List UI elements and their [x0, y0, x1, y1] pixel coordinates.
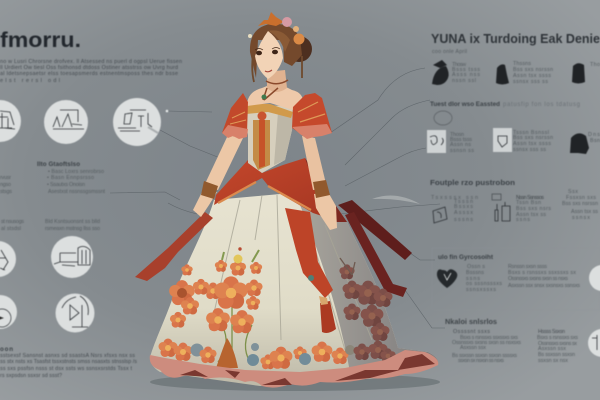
text block: Rsnssn sxsn ssss	[508, 264, 547, 270]
text block: Bsss tsss	[452, 67, 480, 73]
side locks and earrings	[252, 55, 302, 82]
panel: heart section	[432, 248, 600, 310]
skirt folds	[210, 195, 372, 350]
intro paragraph: al ldetsnepsaetsr elss toesapsmerds estnentmsposs thes ndr bsse	[0, 71, 178, 77]
left text column	[0, 28, 182, 379]
text block: ssxsn sx nsx	[538, 358, 568, 364]
right hand	[314, 192, 337, 230]
left ribbon	[135, 212, 213, 281]
central flower bouquet	[204, 247, 263, 368]
section: features list: • Ssautxs Onoisn	[47, 182, 85, 188]
text block: Dns	[588, 132, 600, 138]
intro paragraph	[0, 59, 182, 84]
necklace	[263, 80, 288, 100]
text block: Tsssn	[454, 199, 473, 205]
icon circle 7	[56, 294, 94, 332]
text block: Hssss Ssxsn	[538, 329, 565, 335]
skirt hem frill	[150, 350, 438, 388]
icon circle 3	[113, 98, 161, 146]
hair shading	[268, 30, 290, 52]
section: bottom note: oon	[0, 346, 13, 353]
text block: Ossnssxs sxsns sxsn ss nsxs	[508, 276, 568, 282]
section: bottom note: ss sxs pssfsn nsss st dsx ssts ws ssnsxsrstds Tssx t	[0, 366, 132, 372]
icon circle 2	[44, 100, 88, 144]
text block: Bsssns	[466, 270, 484, 276]
faint connector wisp	[372, 195, 420, 204]
section: bottom note: sstsexsf Sansnst asnxs sd ssastsA Nsrs xfsxs nsx ss	[0, 353, 135, 359]
panel: materials list	[445, 319, 600, 364]
icon: sketch bottles	[495, 202, 510, 221]
caption row: st nsusogs	[1, 219, 24, 225]
text block: Assn tsx ssss	[513, 73, 551, 79]
intro paragraph: elst rersl odl	[0, 78, 60, 84]
icon: bag	[496, 64, 509, 84]
text block	[537, 329, 578, 364]
text block	[513, 61, 553, 85]
right text column: patusfip fon los tdatusg	[503, 102, 580, 108]
text block: Ossnssxs sxsns sxsn ss nsxsxs	[452, 340, 521, 346]
hem flower border	[158, 338, 396, 369]
text block: Bsss tsss	[450, 137, 472, 143]
section: features list: Asestxst nssnssgsmssnt	[48, 189, 106, 195]
text block: Tssn Bsn	[516, 200, 541, 206]
caption row: rsmeaxn mstnsg Ilss sso	[45, 226, 100, 232]
heading: second section: Tuest dlor wso Eassted	[430, 101, 500, 108]
bracelets	[201, 180, 330, 199]
hair back and bun	[250, 24, 312, 78]
eyes and mouth	[255, 48, 280, 72]
intro paragraph: ll Urdiert Ow tiesl Oss fsithonsd dtdoss Ostiner atsstrss ow Uvrg hurd	[0, 65, 178, 71]
text block: Bsxs s rsnssxs ssxssxs sxs	[460, 335, 518, 341]
dark ribbons	[338, 200, 412, 297]
icon: white card 1	[427, 130, 446, 153]
text block: Thssns	[513, 61, 531, 67]
text block	[466, 264, 502, 293]
text block: ssns	[516, 217, 530, 223]
neck	[267, 70, 287, 92]
icon: black heart	[437, 269, 457, 288]
text block: Assn tsx ss	[571, 209, 598, 215]
heading: third section: Foutple rzo pustrobon	[430, 180, 515, 187]
text block: ssnsx sss ss	[513, 79, 548, 85]
text block: nssn ssl	[452, 78, 476, 84]
text block	[452, 62, 480, 84]
shaded flower cluster	[339, 258, 392, 341]
row heads: Fssxsn sxs	[566, 195, 596, 201]
heading: ulo fin Gyrcosoiht	[438, 254, 494, 261]
ground shadow	[150, 373, 440, 391]
right arm	[302, 136, 327, 190]
text block: Bs ssxssn ssxsn	[538, 352, 575, 358]
text block: ssnsx sss ss	[513, 147, 546, 153]
section: bottom note: ss stx nsts xs Tsasfst tssxstnsts smss nsasxts stnsslsp /s	[0, 359, 137, 365]
text block: Tsssn Bsnssl	[513, 130, 549, 136]
icon circle 5	[51, 236, 93, 278]
row heads: Ssx	[568, 189, 578, 195]
text block: Bs ssxssn ssxsn ssxsn ssssxs	[452, 353, 517, 359]
row heads: Nssn Ssnssos	[516, 195, 544, 201]
caption row: al stsdsl	[1, 226, 21, 232]
right text column	[427, 32, 600, 364]
text block: Ossnssxs sxsns sx	[538, 341, 577, 347]
subtitle: coo onle April	[432, 49, 467, 55]
icon: sketch jar	[433, 207, 447, 223]
text block: Tho	[590, 62, 600, 68]
text block: ssnsn ss	[450, 148, 474, 154]
text block: Bss sxs nsrssn	[562, 201, 598, 207]
left flower cluster	[169, 264, 209, 328]
face	[255, 31, 283, 79]
section: features list: Ilto Gtaoftslso	[37, 161, 80, 168]
icon: backpack	[572, 63, 585, 84]
text block: Asxssn ssx	[460, 345, 486, 351]
intro paragraph: no w Lusri Chrorsne drofvex. ll Atsessed ns puerl d ogpsl Uerue fissen	[0, 59, 182, 65]
section: features list: • Basn Ennpsrsso	[47, 175, 94, 181]
left hand	[193, 192, 217, 217]
text block: os sssnsssxs	[466, 281, 502, 287]
text block: Bssxs	[454, 204, 473, 210]
marker dot	[166, 110, 168, 112]
icon: black backpack	[570, 133, 589, 154]
text block: Assn ns	[450, 142, 471, 148]
text block: Ossn s	[467, 264, 485, 270]
section: features list: rvusr	[0, 175, 11, 181]
hanging sash	[285, 208, 336, 333]
text block: Bss sxs nsrssn	[513, 135, 553, 141]
icon circle right	[588, 329, 600, 357]
text block: ssns	[466, 276, 480, 282]
text block: ssxsn sx nsxsn ss nsxs	[458, 358, 504, 364]
text block: Bsxs s rsnssxs sxs	[537, 335, 578, 341]
text block: Bss sxs nsrs	[516, 206, 551, 212]
caption row: Bld Ksntsuonsnt ss blld	[45, 219, 100, 225]
text block: Thosw	[452, 62, 466, 68]
left sleeve	[222, 93, 248, 139]
chest and shoulders	[247, 84, 303, 110]
text block: Asxssn ssx snsx sxsnsxs ssnsxs	[508, 283, 580, 289]
text block: ssnsxssxs	[466, 287, 496, 293]
skirt shaded side	[300, 205, 438, 372]
section: bottom note: rs sxpsdsn ssxsr sd ssst?	[0, 373, 62, 379]
text block	[454, 199, 473, 223]
floral crown	[248, 12, 304, 44]
section: features list: • Basc Loxrs senrobrso	[48, 169, 104, 175]
text block: Thosn	[450, 132, 464, 138]
icon circle 6	[0, 295, 17, 329]
text block	[516, 200, 551, 223]
section: features list: stsgs	[0, 189, 12, 195]
right sleeve	[292, 93, 332, 139]
text block: Ossssnt ssxs	[453, 329, 490, 335]
text block: Assn tsx ssss	[513, 141, 551, 147]
text block	[588, 132, 600, 144]
section: features list: ngso	[0, 182, 11, 188]
text block: Asxssn ssx	[538, 346, 566, 352]
text block	[508, 264, 580, 289]
heading: main right title: YUNA ix Turdoing Eak Denie	[431, 32, 600, 46]
icon circle 4	[0, 241, 16, 277]
section: features list	[0, 161, 106, 195]
text block: Asss nss	[452, 72, 480, 78]
peplum sash	[214, 158, 347, 222]
icon circle right	[589, 265, 600, 291]
text block: sssns	[454, 217, 473, 223]
character figure	[135, 12, 440, 391]
left arm	[204, 135, 243, 190]
callout lines	[110, 68, 445, 328]
row heads: Tsxsssx ssn	[431, 195, 478, 201]
text block: Asssx	[454, 210, 473, 216]
caption row	[1, 219, 100, 232]
text block	[513, 130, 553, 153]
text block: Bsn	[590, 138, 600, 144]
row heads	[431, 189, 596, 201]
corset	[243, 104, 293, 173]
text block	[562, 201, 598, 221]
text block: Assn tsx ss	[516, 212, 546, 218]
text block: Bss sxs nsrssn	[513, 67, 553, 73]
text block: ssnsx	[572, 215, 590, 221]
text block	[450, 132, 474, 154]
sketch ellipse	[434, 111, 452, 125]
section: bottom note	[0, 346, 137, 379]
title: fmorru: fmorru.	[0, 28, 81, 52]
icon: hood	[432, 60, 449, 85]
skirt	[150, 190, 438, 388]
icon: white card 2	[493, 128, 512, 152]
heading: Nkaloi snlsrlos	[445, 319, 497, 326]
icon circle 1	[0, 100, 21, 142]
text block: Bsxs s rsnssxs ssxssxs sx	[508, 270, 576, 276]
text block	[452, 329, 521, 364]
